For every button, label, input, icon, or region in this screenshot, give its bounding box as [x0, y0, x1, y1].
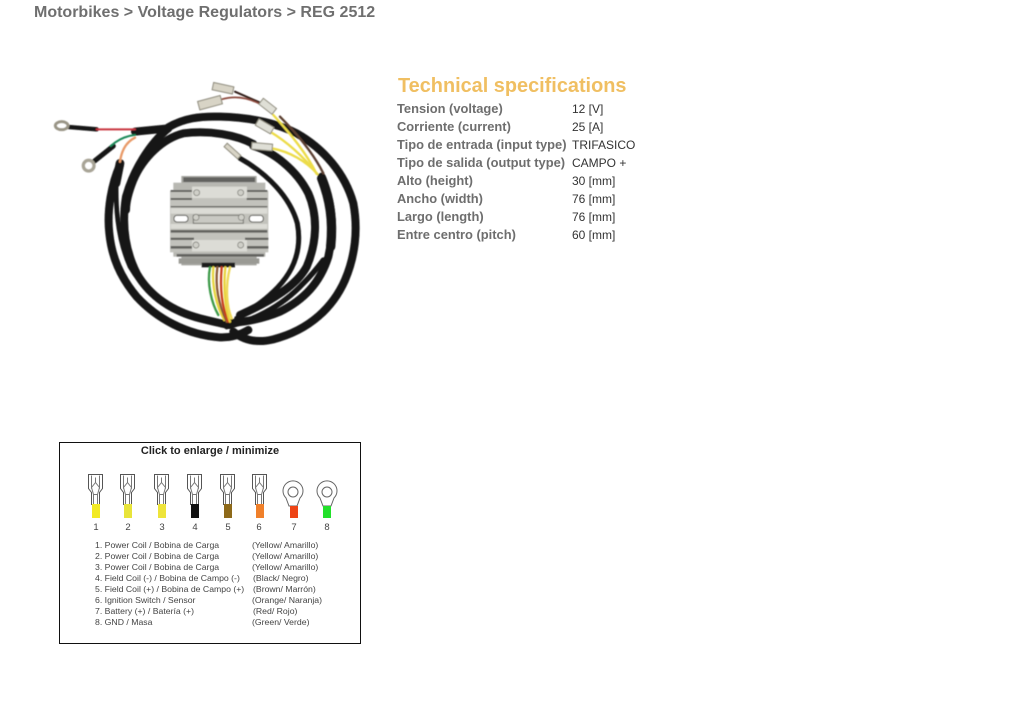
wiring legend: (Brown/ Marrón)	[253, 584, 316, 594]
coloured wires	[97, 92, 323, 174]
specifications table: 76 [mm]	[572, 192, 615, 206]
specifications table: Ancho (width)	[397, 191, 483, 206]
specifications table: CAMPO +	[572, 156, 626, 170]
connector numbers: 6	[256, 522, 262, 533]
specifications table: 12 [V]	[572, 102, 603, 116]
regulator block	[170, 176, 268, 267]
specifications table: Tipo de entrada (input type)	[397, 137, 566, 152]
wiring legend: 2. Power Coil / Bobina de Carga	[95, 551, 219, 561]
connector numbers: 2	[125, 522, 131, 533]
spade and ring terminals	[55, 83, 276, 171]
wiring legend: (Green/ Verde)	[252, 617, 310, 627]
specifications table: 60 [mm]	[572, 228, 615, 242]
wiring legend: 3. Power Coil / Bobina de Carga	[95, 562, 219, 572]
connector icons	[88, 474, 337, 518]
specifications table: 25 [A]	[572, 120, 603, 134]
specifications table	[397, 101, 635, 242]
wiring legend: (Red/ Rojo)	[253, 606, 298, 616]
connector numbers: 7	[291, 522, 297, 533]
connector numbers: 8	[324, 522, 330, 533]
breadcrumb heading: Motorbikes > Voltage Regulators > REG 2512	[34, 4, 375, 21]
product photo: voltage regulator with wiring harness	[53, 81, 360, 346]
wiring legend: 5. Field Coil (+) / Bobina de Campo (+)	[95, 584, 244, 594]
heading: technical specifications: Technical specifications	[398, 75, 626, 97]
wiring legend: (Yellow/ Amarillo)	[252, 551, 318, 561]
wiring legend: (Yellow/ Amarillo)	[252, 562, 318, 572]
specifications table: Entre centro (pitch)	[397, 227, 516, 242]
connector numbers: 3	[159, 522, 165, 533]
connector numbers	[93, 522, 330, 533]
black cable harness	[65, 117, 356, 341]
connector numbers: 5	[225, 522, 231, 533]
specifications table: 76 [mm]	[572, 210, 615, 224]
wiring legend: 8. GND / Masa	[95, 617, 153, 627]
wiring legend: 7. Battery (+) / Batería (+)	[95, 606, 194, 616]
specifications table: Corriente (current)	[397, 119, 511, 134]
specifications table: Alto (height)	[397, 173, 473, 188]
wiring legend: 6. Ignition Switch / Sensor	[95, 595, 196, 605]
connector numbers: 4	[192, 522, 198, 533]
diagram title: Click to enlarge / minimize	[141, 445, 279, 457]
wires below regulator	[209, 267, 232, 322]
wiring legend: 4. Field Coil (-) / Bobina de Campo (-)	[95, 573, 240, 583]
panel: wiring diagram	[59, 442, 361, 644]
specifications table: 30 [mm]	[572, 174, 615, 188]
wiring legend: (Orange/ Naranja)	[252, 595, 322, 605]
wiring legend: (Black/ Negro)	[253, 573, 309, 583]
specifications table: Largo (length)	[397, 209, 484, 224]
wiring legend: (Yellow/ Amarillo)	[252, 540, 318, 550]
wiring legend: 1. Power Coil / Bobina de Carga	[95, 540, 219, 550]
specifications table: Tipo de salida (output type)	[397, 155, 565, 170]
connector numbers: 1	[93, 522, 99, 533]
specifications table: TRIFASICO	[572, 138, 635, 152]
specifications table: Tension (voltage)	[397, 101, 503, 116]
wiring legend	[95, 540, 322, 627]
